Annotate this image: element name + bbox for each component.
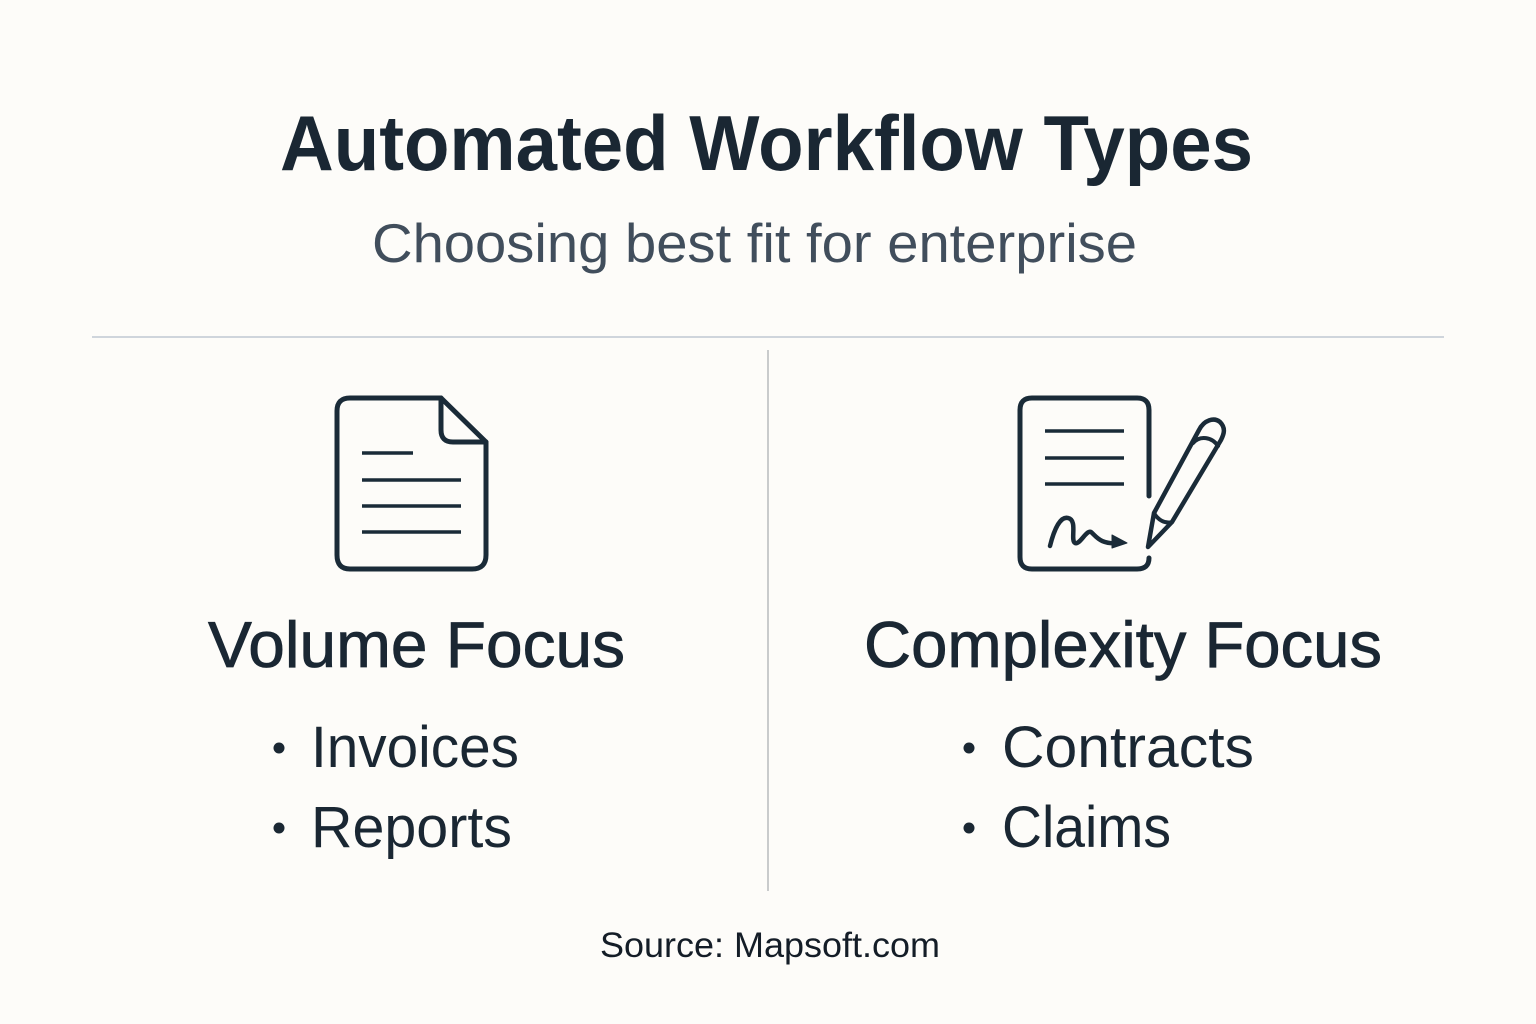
panel: complexity focus bbox=[864, 398, 1382, 860]
list: complexity items: Contracts bbox=[1002, 715, 1254, 780]
list: volume items: Reports bbox=[311, 795, 512, 860]
heading: complexity focus: Complexity Focus bbox=[864, 608, 1382, 681]
panel: volume focus bbox=[208, 398, 625, 860]
source note: Source: Mapsoft.com bbox=[600, 926, 940, 965]
title: Automated Workflow Types bbox=[280, 99, 1253, 187]
subtitle: Choosing best fit for enterprise bbox=[372, 212, 1137, 274]
icon: document bbox=[337, 398, 486, 569]
list: volume items: Invoices bbox=[311, 715, 519, 780]
icon: signed contract with pen bbox=[1020, 398, 1224, 569]
list: complexity items: Claims bbox=[1002, 795, 1171, 860]
heading: volume focus: Volume Focus bbox=[208, 608, 625, 681]
list: complexity items bbox=[964, 715, 1254, 860]
list: volume items bbox=[274, 715, 519, 860]
